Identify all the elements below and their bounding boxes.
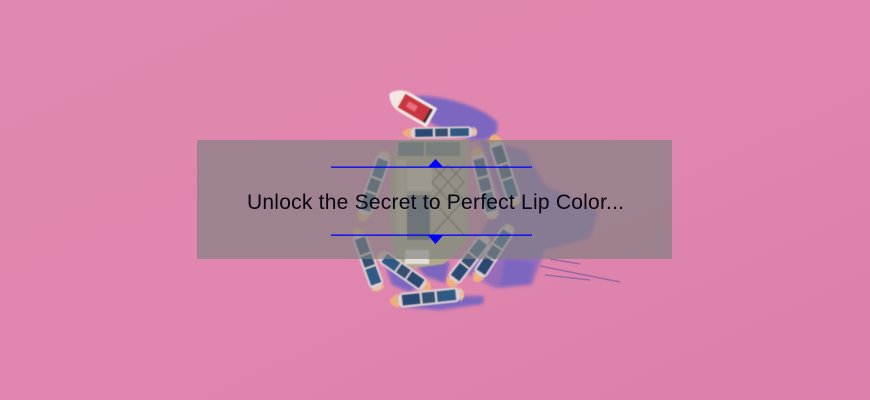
barge: upper right outer — [486, 133, 523, 208]
barge: upper left — [354, 150, 393, 224]
barge: top — [403, 126, 477, 139]
barge: lower right outer — [469, 222, 517, 285]
title: Unlock the Secret to Perfect Lip Color... — [247, 191, 624, 214]
translucent grey title panel — [197, 140, 672, 259]
bottom divider with diamond marker — [331, 234, 532, 244]
barge: bottom — [389, 286, 465, 309]
central platform — [390, 140, 468, 268]
barge: lower left inner — [375, 248, 434, 296]
boat shadows on the water — [384, 96, 598, 310]
top divider with diamond marker — [331, 159, 532, 168]
barge: upper right inner — [468, 145, 501, 221]
barge: lower right inner — [443, 232, 493, 291]
floating platform and moored barges — [349, 126, 523, 309]
thin mast shadows — [540, 259, 620, 282]
white and red boat — [384, 84, 437, 128]
barge: lower left outer — [349, 225, 386, 293]
